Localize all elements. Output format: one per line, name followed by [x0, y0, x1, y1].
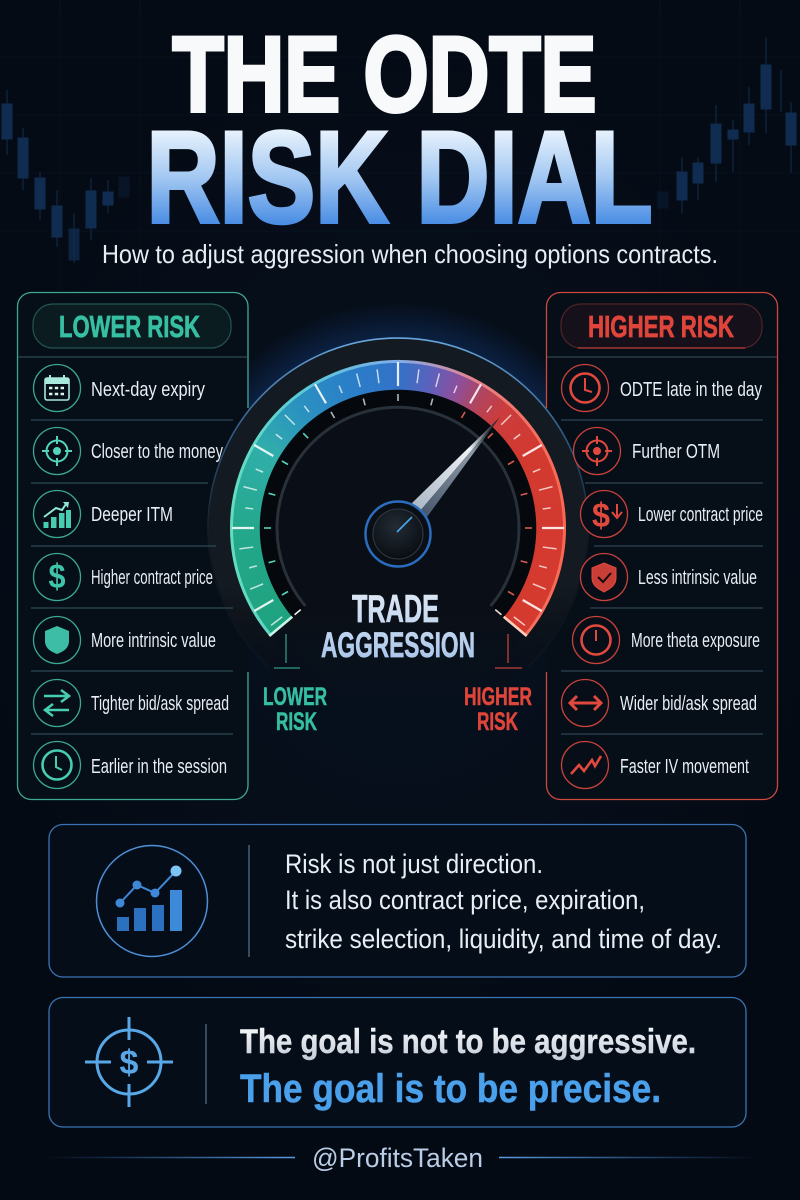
icon: clock theta — [582, 626, 610, 654]
dial label: higher risk: HIGHER — [464, 683, 532, 711]
icon: target — [42, 436, 72, 466]
dial label: higher risk: RISK — [477, 708, 518, 736]
pill heading: lower risk — [33, 304, 231, 348]
dial label: trade aggression: TRADE — [352, 588, 439, 631]
icon: zigzag — [571, 756, 601, 774]
icon: wide arrows — [570, 696, 601, 710]
list text: higher risk: Faster IV movement — [620, 756, 749, 778]
dial label: trade aggression — [321, 588, 475, 665]
background: candlestick chart — [0, 0, 800, 290]
icon: shield check — [592, 563, 616, 592]
panel backgrounds — [178, 366, 618, 560]
band tick marks — [239, 369, 557, 625]
list text: lower risk: More intrinsic value — [91, 630, 216, 652]
goal text: The goal is to be precise. — [240, 1067, 661, 1111]
leader line: higher risk — [495, 634, 522, 668]
icon: dollar target: $ — [120, 1044, 139, 1082]
icon: swap arrows — [44, 690, 69, 716]
callout text — [285, 849, 722, 954]
dial label: lower risk: LOWER — [263, 683, 327, 711]
icon: target — [582, 436, 612, 466]
pill heading: higher risk — [561, 304, 762, 348]
icon: dollar: $ — [48, 558, 66, 596]
callout: risk statement — [48, 824, 747, 978]
dial label: lower risk: RISK — [276, 708, 317, 736]
callout text: Risk is not just direction. — [285, 849, 543, 879]
needle — [412, 417, 500, 517]
icon: shield — [45, 626, 69, 654]
list text: lower risk: Higher contract price — [91, 567, 213, 589]
callout text: It is also contract price, expiration, — [285, 885, 645, 915]
callout: goal statement — [48, 996, 747, 1128]
pill heading: higher risk: HIGHER RISK — [588, 309, 734, 344]
leader line: lower risk — [274, 634, 300, 668]
panel: higher risk — [546, 292, 778, 800]
callout text: strike selection, liquidity, and time of day. — [285, 924, 722, 954]
icon: chart in circle — [96, 846, 208, 956]
icon: calendar — [45, 375, 69, 400]
dial label: lower risk — [263, 683, 327, 736]
icon: dollar down: $ — [592, 497, 610, 535]
list text: lower risk: Tighter bid/ask spread — [91, 693, 229, 715]
icon: clock — [42, 750, 72, 780]
list text: lower risk: Deeper ITM — [91, 504, 173, 526]
icon: growth bars — [44, 502, 71, 528]
footer handle: @ProfitsTaken — [312, 1143, 483, 1173]
icon: clock late — [570, 374, 600, 402]
list text: higher risk: Further OTM — [632, 441, 720, 463]
list text: lower risk: Next-day expiry — [91, 379, 205, 401]
gauge colour band — [230, 360, 566, 636]
title line: RISK DIAL: RISK DIAL — [146, 104, 652, 250]
title — [146, 14, 652, 250]
icon: dollar down — [592, 497, 622, 535]
pill heading: lower risk: LOWER RISK — [59, 309, 200, 344]
goal text — [240, 1023, 696, 1111]
gauge: trade aggression dial — [207, 337, 588, 736]
list text: lower risk — [91, 379, 229, 778]
list text: lower risk: Closer to the money — [91, 441, 223, 463]
subtitle: How to adjust aggression when choosing options contracts. — [102, 239, 718, 269]
icon: dollar target — [85, 1017, 173, 1107]
dial label: trade aggression: AGGRESSION — [321, 626, 475, 665]
list text: higher risk — [620, 379, 763, 778]
panel: lower risk — [16, 292, 249, 800]
dial label: higher risk — [464, 683, 532, 736]
goal text: The goal is not to be aggressive. — [240, 1023, 696, 1061]
inner tick marks — [264, 394, 532, 615]
list text: lower risk: Earlier in the session — [91, 756, 227, 778]
title line: THE ODTE: THE ODTE — [172, 14, 596, 134]
needle hub — [366, 502, 430, 566]
